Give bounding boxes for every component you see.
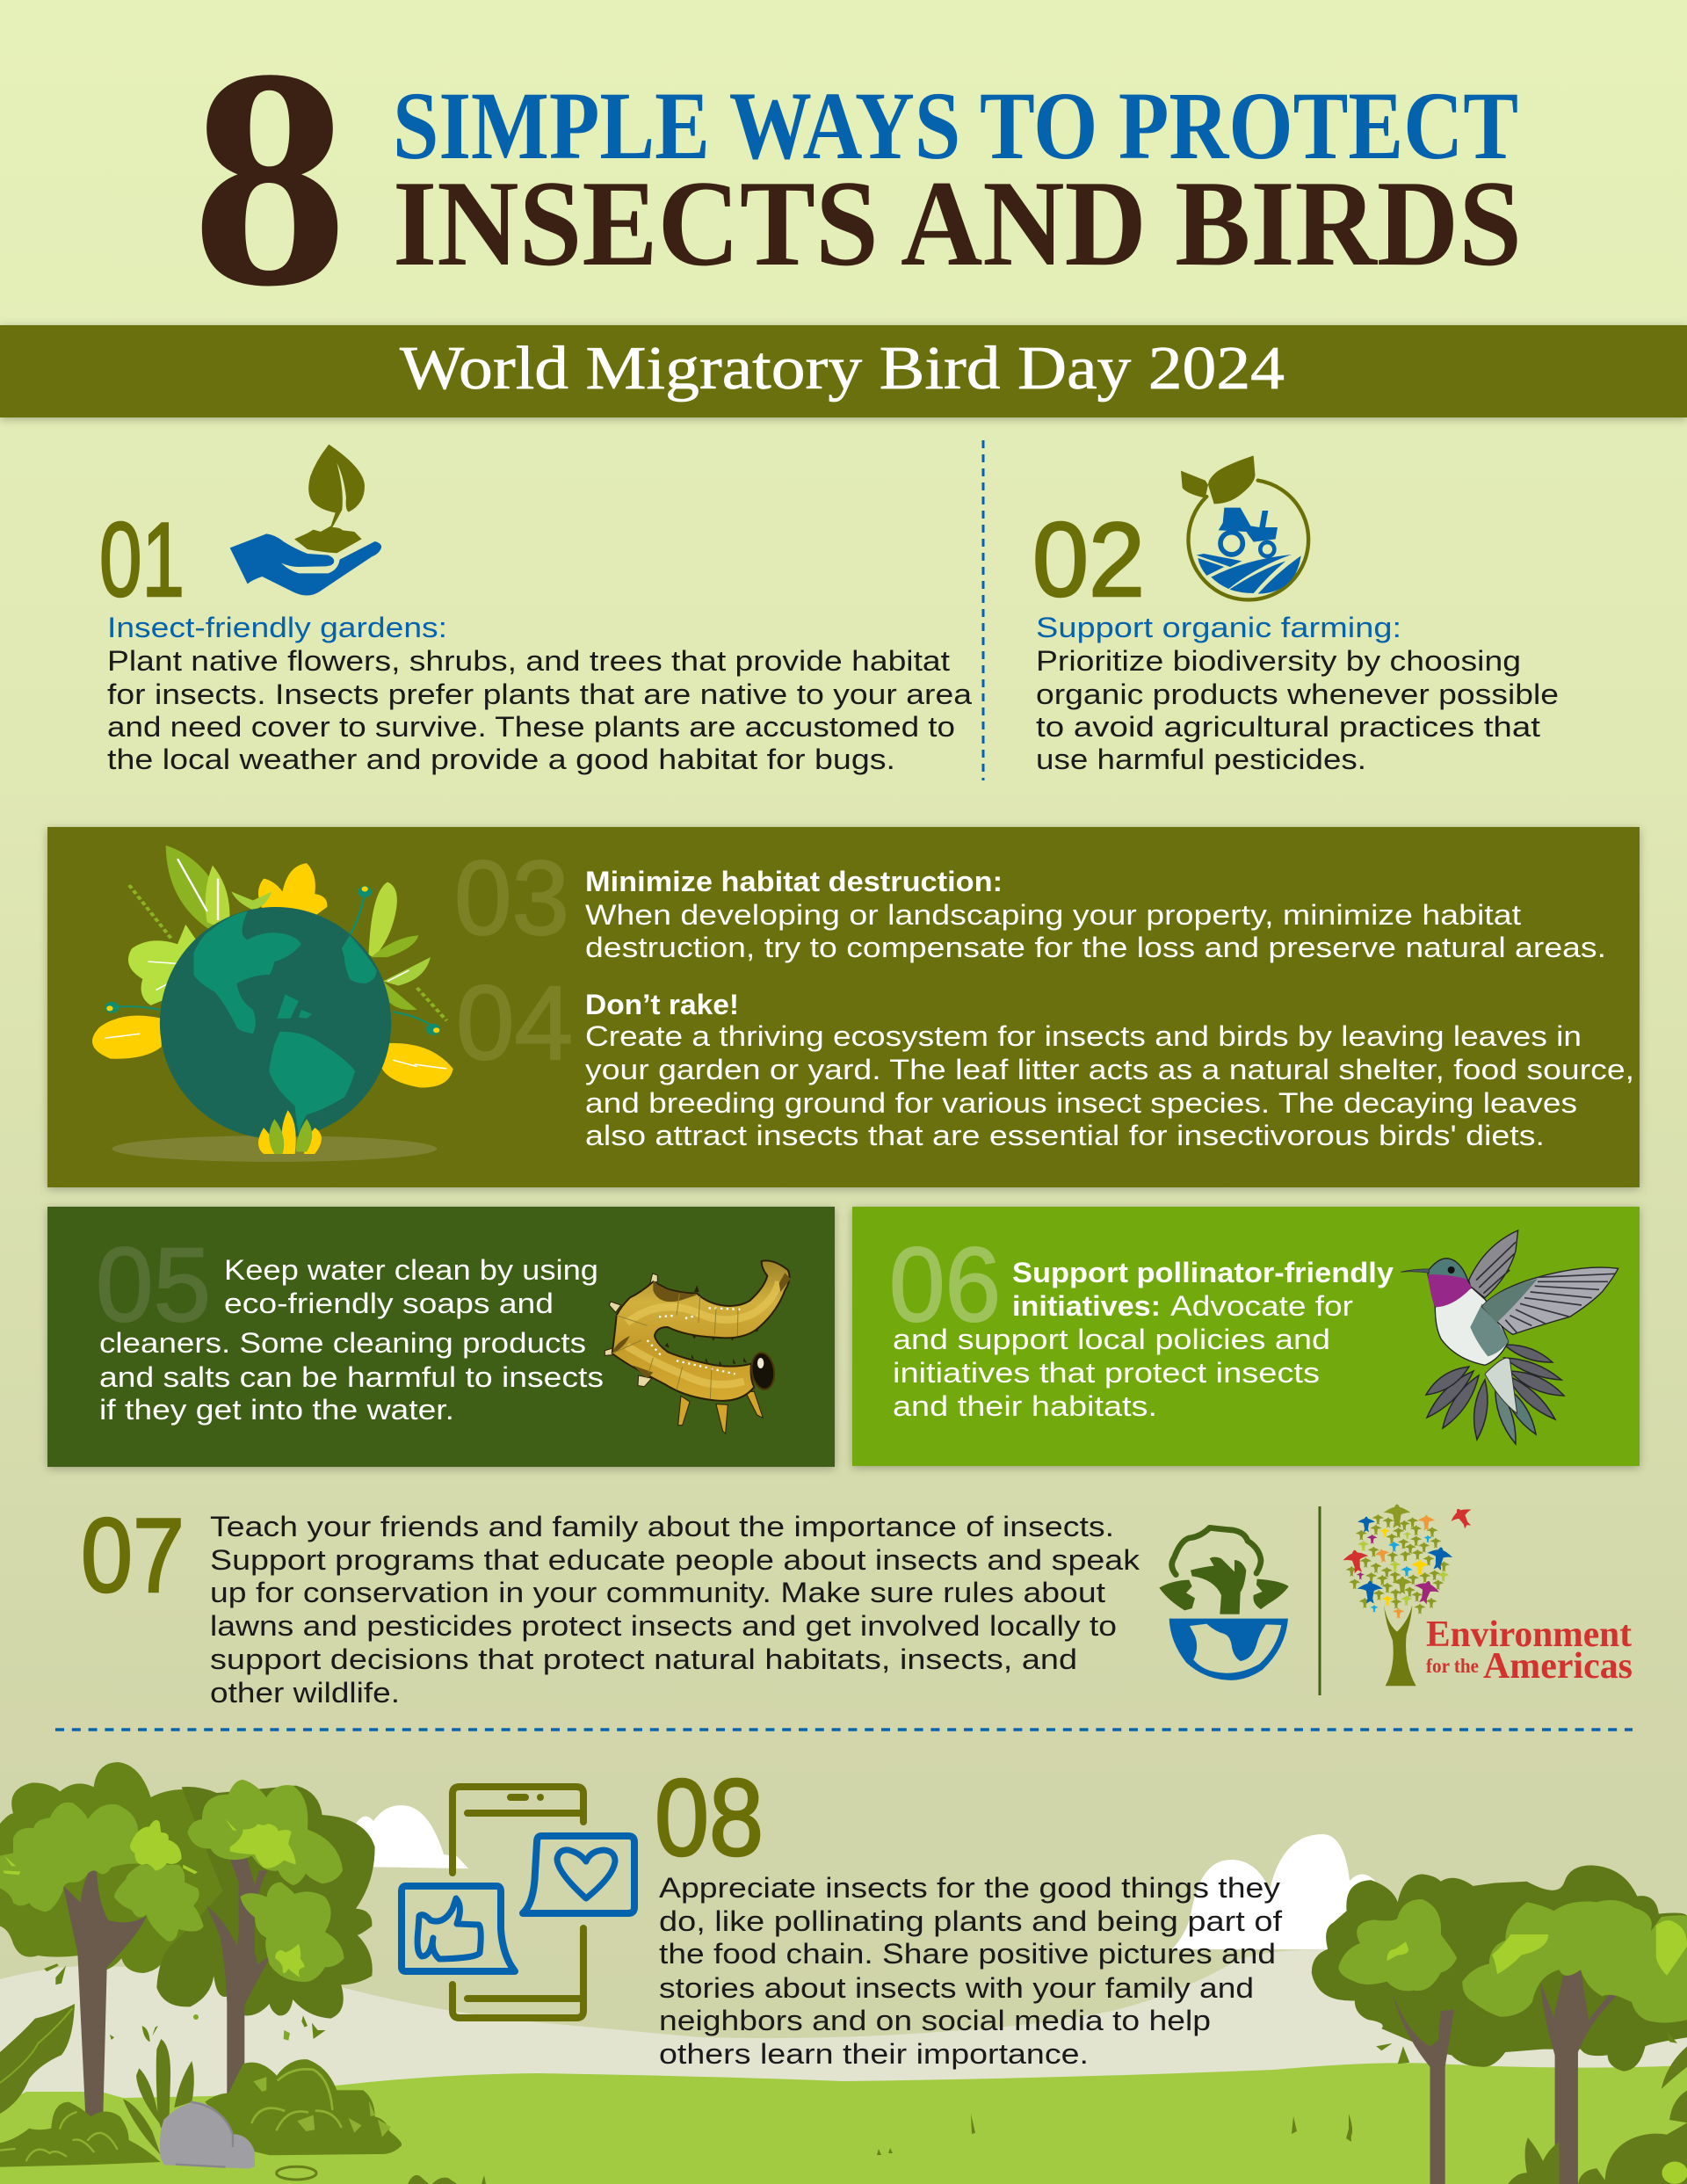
left tree canopy shadow	[0, 1762, 228, 1973]
text 05	[99, 1254, 604, 1426]
divider above 08	[55, 1728, 1633, 1731]
body 01: and need cover to survive. These plants are accustomed to	[107, 711, 955, 743]
section 07	[81, 1497, 1633, 1709]
section 01	[99, 445, 972, 775]
number 06: 06	[889, 1226, 1001, 1344]
text 06: and support local policies and	[893, 1324, 1330, 1355]
body 07: lawns and pesticides protect insects and get involved locally to	[210, 1610, 1117, 1642]
logo text: for the	[1426, 1655, 1479, 1677]
text 04: your garden or yard. The leaf litter acts as a natural shelter, food source,	[585, 1054, 1634, 1085]
right plants	[1508, 2046, 1687, 2184]
icon: tree and earth	[1159, 1527, 1289, 1680]
text 03: When developing or landscaping your property, minimize habitat	[585, 899, 1521, 931]
icon: hand holding plant	[230, 445, 381, 595]
text 06	[893, 1257, 1394, 1422]
body 08: stories about insects with your family and	[659, 1972, 1254, 2004]
rock	[160, 2102, 255, 2169]
ground	[0, 2063, 1687, 2184]
body 01: Plant native flowers, shrubs, and trees that provide habitat	[107, 645, 950, 677]
text 03	[585, 866, 1606, 963]
body 07: up for conservation in your community. Make sure rules about	[210, 1577, 1105, 1608]
text 04: also attract insects that are essential for insectivorous birds' diets.	[585, 1120, 1545, 1151]
illustration: globe with leaves	[92, 845, 453, 1162]
title line 1: SIMPLE WAYS TO PROTECT	[393, 72, 1518, 179]
right-hand tree canopy shadow	[156, 1786, 375, 2019]
light foliage	[3, 1819, 305, 1977]
text 06: Advocate for	[1170, 1290, 1353, 1322]
text 06: initiatives that protect insects	[893, 1357, 1320, 1389]
body 07: Support programs that educate people about insects and speak	[210, 1544, 1140, 1576]
body 08: the food chain. Share positive pictures and	[659, 1938, 1276, 1970]
body 02	[1036, 645, 1559, 775]
icon: organic farming	[1181, 455, 1308, 599]
falling leaves	[44, 1963, 326, 2042]
title line 2: INSECTS AND BIRDS	[393, 156, 1522, 292]
illustration: caterpillar	[605, 1260, 791, 1433]
text 04	[585, 989, 1634, 1151]
number 08: 08	[655, 1758, 764, 1879]
text 06: Support pollinator-friendly	[1012, 1257, 1394, 1288]
ground marks	[408, 2114, 1352, 2184]
text 06: initiatives:	[1012, 1290, 1161, 1322]
number 03: 03	[454, 839, 569, 957]
text 04: Don’t rake!	[585, 989, 739, 1020]
text 04: Create a thriving ecosystem for insects and birds by leaving leaves in	[585, 1020, 1582, 1052]
grass	[123, 2039, 194, 2155]
logo tree of birds	[1342, 1503, 1478, 1686]
body 07: support decisions that protect natural habitats, insects, and	[210, 1643, 1077, 1675]
section 02	[1032, 455, 1559, 775]
icon: phone with social reactions	[402, 1787, 634, 2018]
text 05: cleaners. Some cleaning products	[99, 1327, 586, 1359]
banner	[0, 325, 1687, 417]
body 08: do, like pollinating plants and being part of	[659, 1905, 1282, 1937]
banner text: World Migratory Bird Day 2024	[400, 335, 1285, 403]
heading 01: Insect-friendly gardens:	[107, 612, 447, 643]
number 04: 04	[456, 964, 573, 1082]
body 01: for insects. Insects prefer plants that are native to your area	[107, 678, 972, 710]
ring	[277, 2166, 316, 2180]
text 05: eco-friendly soaps and	[224, 1288, 554, 1319]
text 06: and their habitats.	[893, 1390, 1157, 1422]
body 07: other wildlife.	[210, 1677, 400, 1709]
panel: 06	[852, 1207, 1640, 1466]
trunks	[63, 1866, 147, 2116]
text 05: Keep water clean by using	[224, 1254, 598, 1286]
body 07	[210, 1511, 1140, 1709]
number 01: 01	[99, 501, 185, 619]
hills	[0, 1949, 1687, 2109]
body 08: Appreciate insects for the good things they	[659, 1872, 1280, 1904]
big leaf	[0, 2004, 75, 2114]
text 04: and breeding ground for various insect species. The decaying leaves	[585, 1087, 1577, 1119]
title	[192, 5, 1522, 352]
illustration: landscape	[0, 1762, 1687, 2184]
right bush	[205, 2059, 402, 2155]
body 02: organic products whenever possible	[1036, 678, 1559, 710]
text 03: Minimize habitat destruction:	[585, 866, 1003, 897]
right trees	[1312, 1865, 1687, 2184]
body 08	[659, 1872, 1282, 2070]
number 07: 07	[81, 1497, 185, 1614]
body 01	[107, 645, 972, 775]
text 05: if they get into the water.	[99, 1394, 454, 1426]
body 01: the local weather and provide a good habitat for bugs.	[107, 744, 895, 775]
body 08: neighbors and on social media to help	[659, 2005, 1211, 2036]
body 02: Prioritize biodiversity by choosing	[1036, 645, 1521, 677]
clouds	[356, 1805, 1406, 1949]
left bush	[0, 2102, 161, 2167]
text 05: and salts can be harmful to insects	[99, 1361, 604, 1393]
panel: 03 and 04	[47, 827, 1640, 1187]
divider	[1318, 1506, 1321, 1695]
logo text: Americas	[1483, 1646, 1633, 1687]
logo text	[1426, 1614, 1633, 1687]
illustration: hummingbird	[1401, 1230, 1618, 1444]
mid foliage	[0, 1803, 204, 1941]
panel: 05	[47, 1207, 835, 1467]
text 03: destruction, try to compensate for the loss and preserve natural areas.	[585, 932, 1606, 963]
section 08	[402, 1758, 1282, 2070]
body 02: to avoid agricultural practices that	[1036, 711, 1540, 743]
body 02: use harmful pesticides.	[1036, 744, 1366, 775]
number 05: 05	[96, 1226, 211, 1344]
left trees	[0, 1762, 402, 2180]
big number 8: 8	[192, 5, 348, 352]
heading 02: Support organic farming:	[1036, 612, 1401, 643]
logo: Environment for the Americas	[1342, 1503, 1633, 1687]
body 07: Teach your friends and family about the importance of insects.	[210, 1511, 1114, 1542]
divider between 01 and 02	[982, 440, 984, 780]
body 08: others learn their importance.	[659, 2038, 1089, 2070]
logo text: Environment	[1426, 1614, 1632, 1655]
number 02: 02	[1032, 501, 1145, 619]
